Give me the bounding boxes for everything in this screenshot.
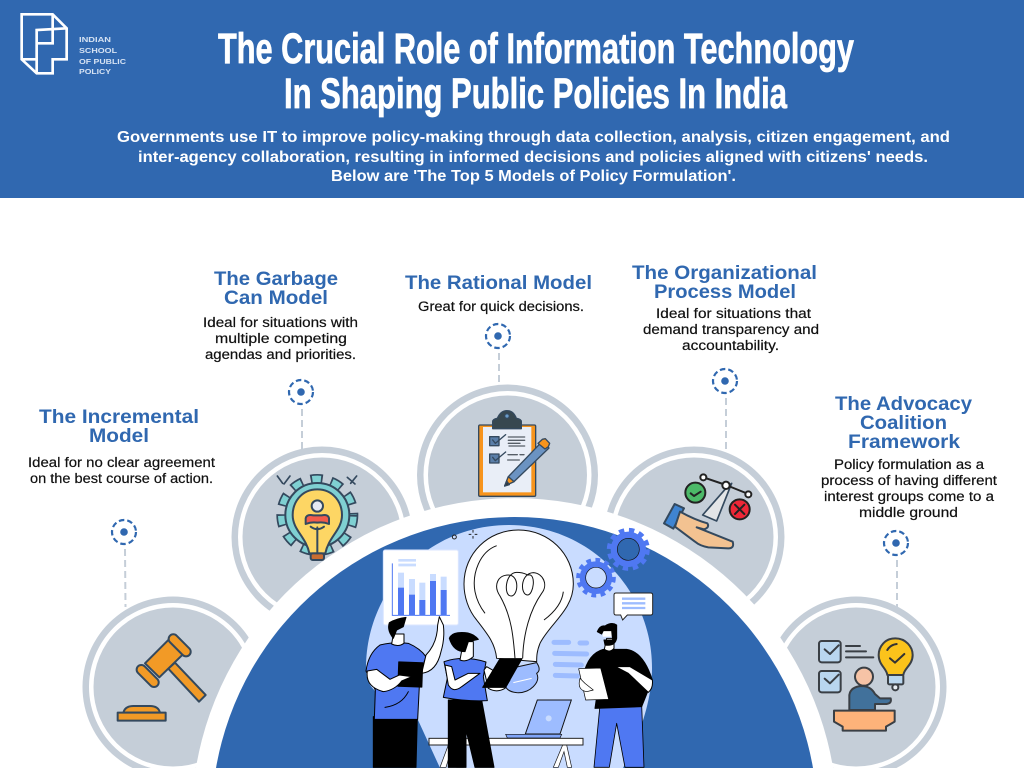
panel: Garbage Can Model text: multiple competing <box>215 331 347 346</box>
panel: Incremental Model text <box>28 406 215 486</box>
intro text <box>117 129 950 185</box>
panel: Garbage Can Model text: agendas and priorities. <box>205 347 356 362</box>
person: left man <box>366 617 444 767</box>
panel: Advocacy Coalition Framework text: Framework <box>848 431 960 453</box>
panel: Organizational Process Model text <box>632 262 819 353</box>
connector: Advocacy <box>884 531 908 607</box>
person: right man <box>579 624 652 767</box>
logo: Indian School of Public Policy: POLICY <box>79 67 111 76</box>
panel: Garbage Can Model text: Ideal for situations with <box>203 315 358 330</box>
ring: Advocacy <box>765 597 947 768</box>
panel: Advocacy Coalition Framework text: process of having different <box>821 473 997 488</box>
panel: Incremental Model text: Ideal for no clear agreement <box>28 455 215 470</box>
panel: Garbage Can Model text <box>203 268 358 362</box>
panel: Rational Model text <box>405 272 592 314</box>
small decorative marks <box>452 530 477 539</box>
ring: Rational <box>417 384 598 566</box>
panel: Advocacy Coalition Framework text: The Advocacy <box>835 393 972 415</box>
person: woman <box>443 633 522 767</box>
desk and laptop <box>429 700 583 767</box>
panel: Garbage Can Model text: Can Model <box>224 287 328 309</box>
icon: advocate at podium with checklist and bulb <box>819 638 913 731</box>
intro text: inter-agency collaboration, resulting in informed decisions and policies aligned with citizens' needs. <box>138 149 928 166</box>
panel: Incremental Model text: Model <box>89 425 149 447</box>
intro text: Governments use IT to improve policy-making through data collection, analysis, citizen engagement, and <box>117 129 950 146</box>
ring: Garbage Can <box>232 446 412 628</box>
central blue dome <box>216 517 813 768</box>
text lines <box>554 642 587 676</box>
connector: Rational <box>486 324 510 395</box>
logo: Indian School of Public Policy <box>22 14 127 76</box>
logo: Indian School of Public Policy: OF PUBLIC <box>79 57 127 66</box>
ring: Incremental <box>82 597 264 768</box>
panel: Advocacy Coalition Framework text: Policy formulation as a <box>834 457 985 472</box>
panel: Organizational Process Model text: accountability. <box>682 338 779 353</box>
panel: Rational Model text: Great for quick decisions. <box>418 299 584 314</box>
icon: clipboard and pencil <box>479 411 550 496</box>
icon: gavel <box>118 632 206 721</box>
header band <box>0 0 1024 198</box>
central illustration: team around a big idea <box>366 530 653 767</box>
connector: Organizational <box>713 369 737 457</box>
panel: Advocacy Coalition Framework text <box>821 393 997 520</box>
title <box>218 25 854 118</box>
panel: Incremental Model text: The Incremental <box>39 406 199 428</box>
title: In Shaping Public Policies In India <box>284 70 788 118</box>
panel: Advocacy Coalition Framework text: middle ground <box>859 505 958 520</box>
icon: hand and scales <box>664 474 751 548</box>
intro text: Below are 'The Top 5 Models of Policy Formulation'. <box>331 168 736 185</box>
panel: Garbage Can Model text: The Garbage <box>214 268 338 290</box>
panel: Advocacy Coalition Framework text: interest groups come to a <box>824 489 995 504</box>
connector: Incremental <box>112 520 136 607</box>
connector: Garbage Can <box>289 380 313 457</box>
speech bubble <box>614 593 653 620</box>
gears <box>579 530 647 595</box>
ring: Organizational <box>604 446 784 628</box>
pale blue backdrop <box>366 525 652 768</box>
panel: Incremental Model text: on the best course of action. <box>30 471 213 486</box>
panel: Rational Model text: The Rational Model <box>405 272 592 294</box>
panel: Organizational Process Model text: demand transparency and <box>643 322 819 337</box>
logo: Indian School of Public Policy: INDIAN <box>79 35 111 44</box>
logo: Indian School of Public Policy: SCHOOL <box>79 46 118 55</box>
central white halo <box>196 498 833 768</box>
panel: Organizational Process Model text: The Organizational <box>632 262 817 284</box>
panel: Organizational Process Model text: Ideal for situations that <box>656 306 811 321</box>
panel: Organizational Process Model text: Process Model <box>654 281 796 303</box>
chart card <box>383 550 458 625</box>
icon: gear with light bulb <box>277 476 357 560</box>
large light bulb <box>464 530 573 693</box>
panel: Advocacy Coalition Framework text: Coalition <box>860 412 947 434</box>
